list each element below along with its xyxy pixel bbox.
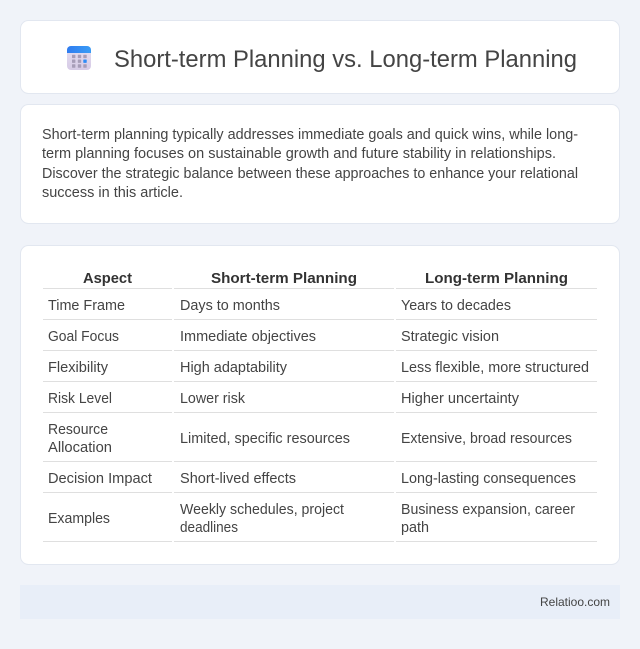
table header row: Aspect [83,270,132,287]
intro paragraph: Discover the strategic balance between these approaches to enhance your relational [42,166,578,182]
row: goal focus: Immediate objectives [180,329,316,345]
icon: calendar [67,46,91,70]
row: time frame [48,298,511,314]
row: goal focus [48,329,499,345]
row: decision impact [48,471,576,487]
row: examples: Examples [48,511,110,527]
row: time frame: Time Frame [48,298,125,314]
row: resource allocation [48,422,572,456]
row: flexibility: Flexibility [48,360,109,376]
row: examples: Business expansion, career [401,502,575,518]
row: resource allocation: Resource [48,422,108,438]
row: decision impact: Decision Impact [48,471,152,487]
title: Short-term Planning vs. Long-term Planning [114,46,577,73]
row: risk level: Higher uncertainty [401,391,520,407]
intro paragraph [42,127,578,201]
row: flexibility: High adaptability [180,360,288,376]
table header row [83,270,568,287]
row: examples: path [401,520,429,536]
row: time frame: Days to months [180,298,280,314]
row: decision impact: Long-lasting consequences [401,471,576,487]
intro paragraph: term planning focuses on sustainable growth and future stability in relationships. [42,146,556,162]
intro paragraph: success in this article. [42,185,183,201]
panel: introduction [20,104,620,224]
intro paragraph: Short-term planning typically addresses immediate goals and quick wins, while long- [42,127,578,143]
panel: comparison table [20,246,620,564]
row: resource allocation: Extensive, broad resources [401,431,572,447]
table header row: Short-term Planning [211,270,357,287]
panel: title header [20,20,620,94]
row: examples: deadlines [180,520,238,536]
row: risk level: Risk Level [48,391,112,407]
row: examples: Weekly schedules, project [180,502,344,518]
row: goal focus: Goal Focus [48,329,119,345]
row: examples [48,502,575,536]
footer bar [20,585,620,619]
footer brand: Relatioo.com [540,595,610,609]
row: risk level: Lower risk [180,391,246,407]
row: flexibility: Less flexible, more structured [401,360,589,376]
row: resource allocation: Allocation [48,440,112,456]
row: flexibility [48,360,589,376]
row: decision impact: Short-lived effects [180,471,296,487]
row: resource allocation: Limited, specific resources [180,431,350,447]
row: risk level [48,391,520,407]
row: time frame: Years to decades [401,298,511,314]
row: goal focus: Strategic vision [401,329,499,345]
table header row: Long-term Planning [425,270,568,287]
